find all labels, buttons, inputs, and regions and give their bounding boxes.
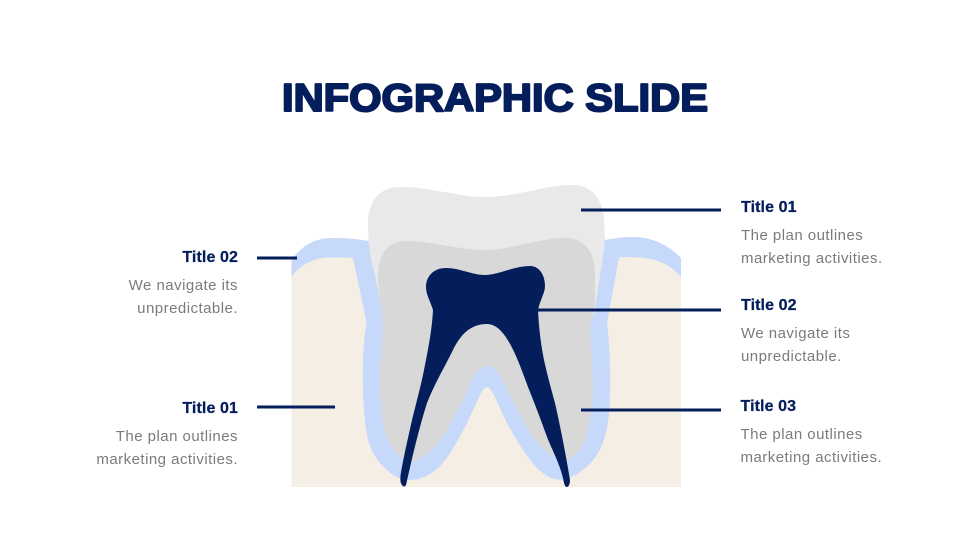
label: right Title 03: marketing activities. bbox=[740, 449, 882, 466]
label: left Title 01: Title 01 bbox=[182, 400, 238, 417]
label: right Title 03: The plan outlines bbox=[740, 426, 863, 443]
label: right Title 02: unpredictable. bbox=[741, 348, 842, 365]
label: right Title 02: Title 02 bbox=[741, 297, 797, 314]
label: left Title 02: unpredictable. bbox=[137, 300, 238, 317]
label: right Title 01: marketing activities. bbox=[741, 250, 883, 267]
jaw bone bbox=[292, 250, 681, 487]
label: left Title 02: We navigate its bbox=[129, 277, 238, 294]
enamel crown bbox=[368, 185, 605, 315]
label: left Title 02: Title 02 bbox=[182, 249, 238, 266]
label: left Title 01 bbox=[96, 400, 238, 468]
label: left Title 01: marketing activities. bbox=[96, 451, 238, 468]
label: left Title 01: The plan outlines bbox=[116, 428, 238, 445]
label: right Title 01 bbox=[741, 199, 883, 267]
dentin bbox=[378, 238, 595, 463]
label: right Title 01: The plan outlines bbox=[741, 227, 863, 244]
label: right Title 03 bbox=[740, 398, 882, 466]
title: INFOGRAPHIC SLIDE bbox=[282, 77, 708, 120]
pulp bbox=[400, 266, 570, 487]
label: right Title 01: Title 01 bbox=[741, 199, 797, 216]
label: right Title 03: Title 03 bbox=[740, 398, 796, 415]
gum bbox=[292, 237, 681, 480]
label: left Title 02 bbox=[128, 249, 238, 317]
label: right Title 02: We navigate its bbox=[741, 325, 850, 342]
label: right Title 02 bbox=[741, 297, 850, 365]
